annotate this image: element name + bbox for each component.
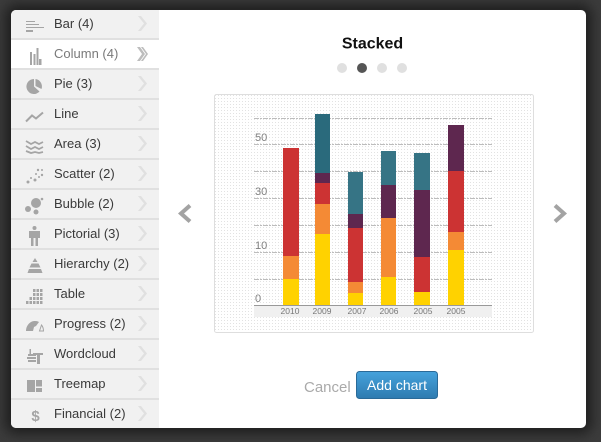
stacked column chart: [214, 94, 534, 332]
y axis labels: [255, 132, 267, 305]
x axis labels: [281, 306, 466, 316]
column 2007: [348, 172, 363, 305]
menu item: Line: Line: [54, 106, 79, 121]
menu item: Line: [11, 100, 159, 130]
menu item: Hierarchy: Hierarchy (2): [54, 256, 129, 271]
menu item: Bar: Bar (4): [54, 16, 94, 31]
x axis labels: 2010: [281, 306, 300, 316]
add chart button: [356, 372, 438, 398]
cancel link: Cancel: [304, 379, 351, 396]
menu item: Pictorial: [11, 220, 159, 250]
y axis labels: 50: [255, 132, 267, 144]
menu item: Wordcloud: Wordcloud: [54, 346, 116, 361]
menu item: Hierarchy: [11, 250, 159, 280]
column 2010: [283, 148, 299, 305]
menu item: Wordcloud: [11, 340, 159, 370]
menu item: Table: Table: [54, 286, 85, 301]
title: Stacked: [342, 36, 403, 52]
menu item: Treemap: Treemap: [54, 376, 106, 391]
column 2006: [381, 151, 396, 305]
menu item: Area: Area (3): [54, 136, 101, 151]
menu item: Table: [11, 280, 159, 310]
menu item: Column (active): [11, 40, 159, 70]
menu item: Area: [11, 130, 159, 160]
sidebar: chart types: [11, 10, 159, 428]
column 2005 second: [448, 125, 464, 305]
menu item: Progress: Progress (2): [54, 316, 126, 331]
menu item: Financial: Financial (2): [54, 406, 126, 421]
x axis labels: 2009: [313, 306, 332, 316]
x axis labels: 2007: [348, 306, 367, 316]
y axis labels: 30: [255, 186, 267, 198]
menu item: Scatter: [11, 160, 159, 190]
x axis labels: 2006: [380, 306, 399, 316]
x axis labels: 2005: [414, 306, 433, 316]
add chart button: Add chart: [367, 377, 427, 393]
x axis labels: 2005: [447, 306, 466, 316]
menu item: Pie: [11, 70, 159, 100]
carousel pagination dots: [337, 63, 407, 73]
menu item: Bubble: Bubble (2): [54, 196, 114, 211]
menu item: Progress: [11, 310, 159, 340]
column 2009: [315, 114, 330, 305]
menu item: Financial: [31, 406, 147, 425]
column 2005: [414, 153, 430, 305]
menu item: Scatter: Scatter (2): [54, 166, 115, 181]
y axis labels: 0: [255, 293, 261, 305]
menu item: Pictorial: Pictorial (3): [54, 226, 120, 241]
arrow: previous: [181, 206, 190, 222]
menu item: Bar: [11, 10, 159, 40]
y axis labels: 10: [255, 240, 267, 252]
menu item: Financial: $: [31, 408, 40, 425]
menu item: Pie: Pie (3): [54, 76, 92, 91]
menu item: Bubble: [11, 190, 159, 220]
arrow: next: [555, 206, 564, 222]
menu item: Column (active): Column (4): [54, 46, 118, 61]
menu item: Treemap: [11, 370, 159, 400]
